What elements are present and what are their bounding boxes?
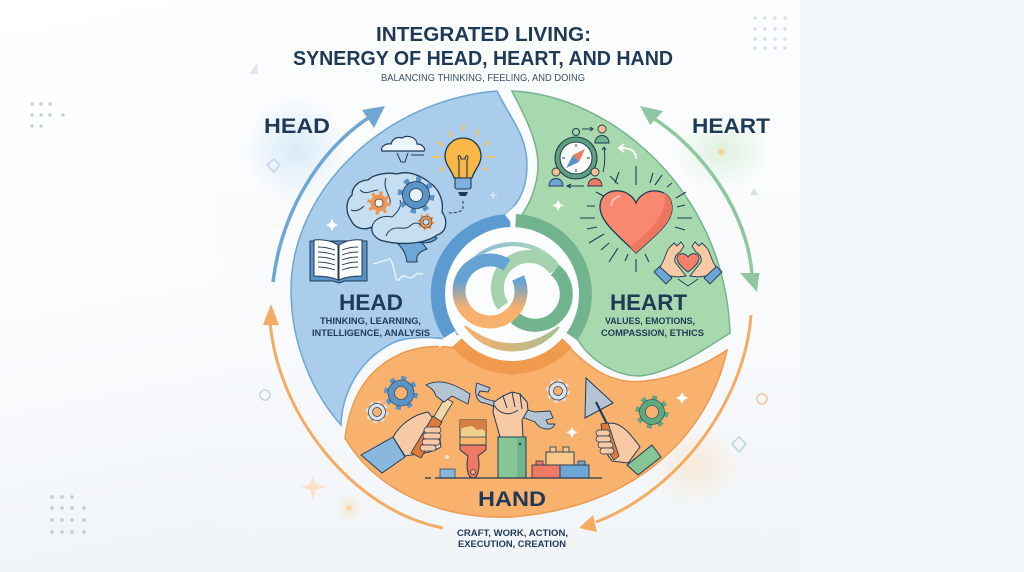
icon: brain: [347, 173, 446, 262]
sparkles: [445, 392, 688, 459]
icon: large blue gear: [400, 179, 432, 211]
head panel description: [312, 316, 430, 338]
icon: hands forming heart: [654, 242, 722, 286]
icon: people: [549, 125, 609, 188]
label: HEART: HEART: [692, 115, 770, 138]
hand description: CRAFT, WORK, ACTION,: [457, 528, 568, 538]
heart panel description: VALUES, EMOTIONS,: [605, 316, 695, 326]
hand description: EXECUTION, CREATION: [458, 539, 566, 549]
arrow: hand cycle left: [263, 304, 443, 528]
ground line: [425, 477, 602, 479]
arrow: hand cycle right: [579, 315, 751, 532]
icon: trowel and hand: [585, 378, 661, 475]
title: [293, 23, 673, 70]
icon: green gear: [638, 398, 666, 426]
arrow: heart cycle: [640, 106, 760, 292]
heart panel description: COMPASSION, ETHICS: [601, 328, 704, 338]
hand panel heading: HAND: [478, 488, 546, 511]
label: HEAD: HEAD: [264, 115, 330, 138]
icon: compass: [555, 128, 597, 179]
icon: cloud: [382, 136, 425, 162]
sparkle: [552, 200, 564, 211]
panel: heart: [512, 91, 730, 376]
subtitle: BALANCING THINKING, FEELING, AND DOING: [381, 72, 585, 84]
icon: small grey gear: [368, 402, 386, 422]
head panel description: INTELLIGENCE, ANALYSIS: [312, 328, 430, 338]
head panel heading: HEAD: [339, 290, 403, 315]
title: INTEGRATED LIVING:: [376, 23, 591, 46]
center emblem: [431, 205, 592, 374]
sparkle: [326, 219, 338, 231]
icon: blue gear: [386, 378, 416, 408]
icon: small orange gear: [419, 215, 433, 229]
heart panel description: [601, 316, 704, 338]
title: SYNERGY OF HEAD, HEART, AND HAND: [293, 47, 673, 70]
hand description: [457, 528, 568, 549]
panel: hand: [345, 347, 727, 517]
icon: light bulb: [433, 125, 497, 213]
icon: open book: [310, 240, 367, 283]
icon: building blocks: [440, 447, 589, 478]
squiggle: [373, 259, 423, 280]
icon: wrench in fist: [476, 383, 555, 478]
icon: hammer and hand: [361, 382, 470, 473]
icon: right grey gear: [548, 381, 568, 401]
icon: paint brush: [460, 420, 486, 478]
heart panel heading: HEART: [610, 290, 688, 315]
icon: orange gear: [369, 193, 389, 213]
icon: radiating heart: [580, 166, 692, 272]
head panel description: THINKING, LEARNING,: [320, 316, 421, 326]
white curved arrow: [619, 144, 636, 159]
arrow: head cycle: [273, 106, 385, 282]
panel: head: [291, 91, 527, 425]
